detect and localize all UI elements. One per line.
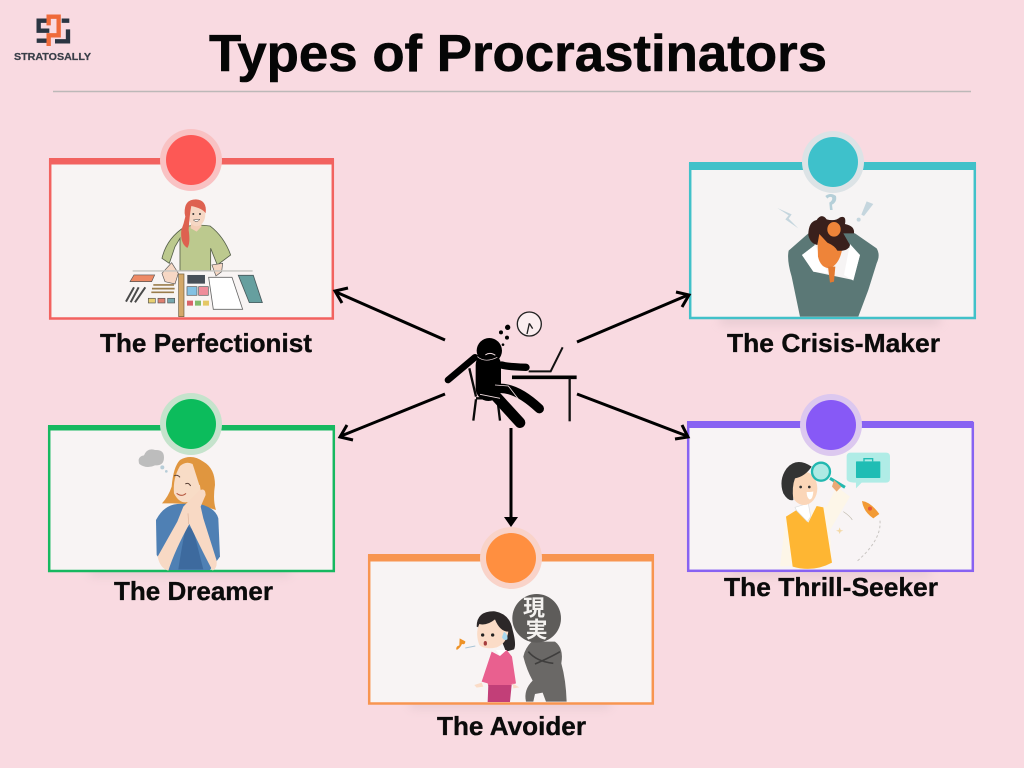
arrow: to The Avoider <box>504 428 518 527</box>
panel: The Crisis-Maker <box>689 131 976 318</box>
icon: procrastinator at desk with clock <box>448 312 577 423</box>
arrow: to The Crisis-Maker <box>577 292 689 342</box>
panel: The Dreamer <box>48 393 335 571</box>
panel: The Thrill-Seeker <box>687 394 973 571</box>
icon: perfectionist number badge <box>160 129 222 191</box>
label: The Perfectionist: The Perfectionist <box>100 328 312 358</box>
illustration: stressed man holding his head <box>777 194 879 317</box>
arrow: to The Dreamer <box>340 394 445 440</box>
logo: Stratosally: STRATOSALLY <box>14 51 91 63</box>
illustration: girl ignoring reality figure: 実 <box>526 612 548 644</box>
illustration: girl ignoring reality figure: 現 <box>523 591 545 623</box>
icon: thrill-seeker number badge <box>800 394 862 456</box>
label: The Dreamer: The Dreamer <box>114 576 273 606</box>
label: The Crisis-Maker: The Crisis-Maker <box>727 328 940 358</box>
arrow: to The Thrill-Seeker <box>577 394 688 439</box>
icon: wall clock <box>517 312 541 336</box>
illustration: girl ignoring reality figure <box>456 591 567 702</box>
label: The Avoider: The Avoider <box>437 711 586 741</box>
icon: crisis-maker number badge <box>802 131 864 193</box>
illustration: woman daydreaming <box>139 449 220 571</box>
logo: Stratosally <box>14 17 91 63</box>
panel: The Perfectionist <box>49 129 334 318</box>
icon: dreamer number badge <box>160 393 222 455</box>
panel: The Avoider <box>368 527 654 704</box>
title: Types of Procrastinators <box>209 25 827 83</box>
label: The Thrill-Seeker: The Thrill-Seeker <box>724 572 938 602</box>
illustration: woman arranging items on a desk <box>126 199 262 317</box>
arrow: to The Perfectionist <box>335 288 445 340</box>
illustration: man with magnifying glass and rocket <box>780 453 890 569</box>
icon: avoider number badge <box>480 527 542 589</box>
